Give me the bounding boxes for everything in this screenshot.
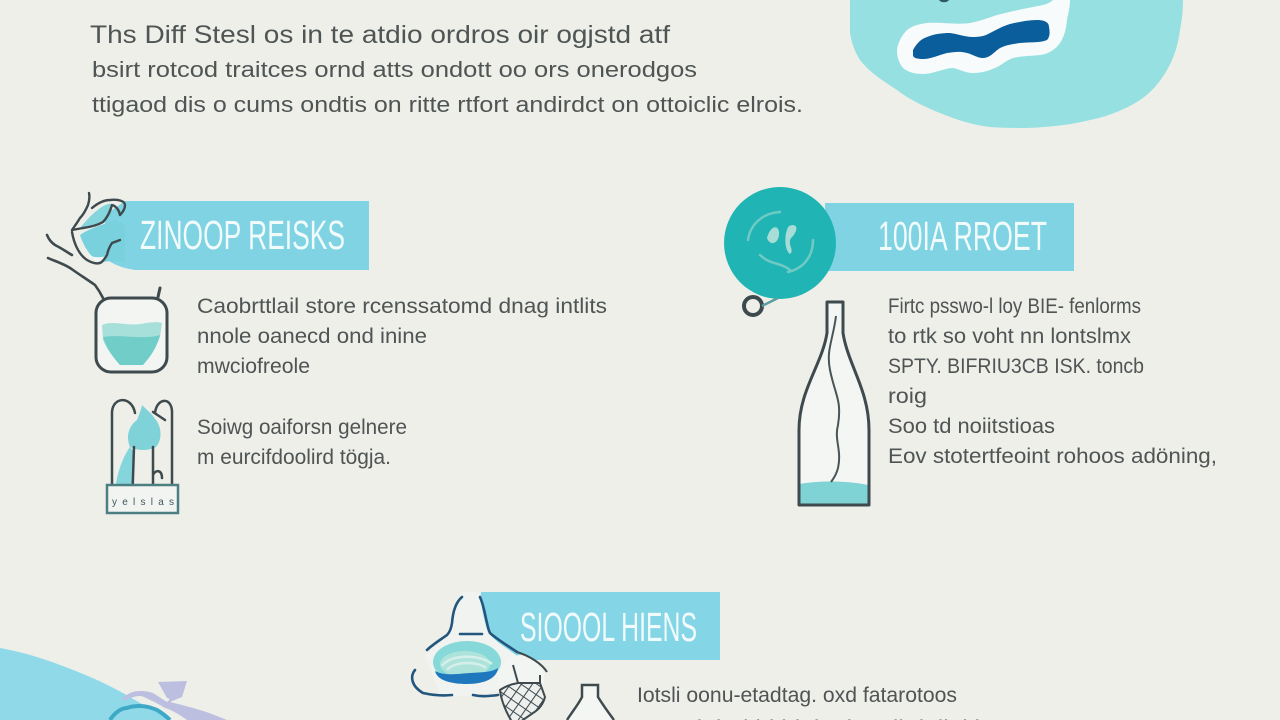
text block: right paragraph: Eov stotertfeoint rohoos adöning, <box>888 445 1217 468</box>
text block: right paragraph: Soo td noiitstioas <box>888 415 1055 438</box>
panel: bottom section <box>412 592 980 720</box>
panel: left section <box>47 193 607 513</box>
text block: left second paragraph: m eurcifdoolird tögja. <box>197 446 391 469</box>
text block: bottom paragraph: Iotsli oonu-etadtag. oxd fatarotoos <box>637 684 957 707</box>
text block: right paragraph: to rtk so voht nn lontslmx <box>888 325 1132 348</box>
icon: plant in planter: y e l s l a s <box>112 497 174 508</box>
icon: small ring pin <box>744 297 778 315</box>
decorative blob: top right water shape <box>850 0 1183 128</box>
intro text block: Ths Diff Stesl os in te atdio ordros oir ogjstd atf <box>90 21 670 49</box>
heading banner: right: 100IA RROET <box>878 213 1047 259</box>
text block: right paragraph: SPTY. BIFRIU3CB ISK. toncb <box>888 355 1144 378</box>
text block: bottom paragraph <box>637 684 980 720</box>
text block: right paragraph <box>888 295 1217 468</box>
text block: left first paragraph: mwciofreole <box>197 355 310 378</box>
icon: small bottle <box>566 685 614 720</box>
text block: left second paragraph: Soiwg oaiforsn gelnere <box>197 416 407 439</box>
heading banner: left: ZINOOP REISKS <box>140 212 345 258</box>
heading banner: bottom: SIOOOL HIENS <box>520 604 697 650</box>
icon: water container <box>96 288 167 372</box>
heading banner: right <box>825 203 1074 271</box>
intro text block <box>90 21 803 117</box>
icon: funnel flask with water <box>412 592 520 696</box>
icon: mesh sack <box>498 652 547 720</box>
intro text block: ttigaod dis o cums ondtis on ritte rtfort andirdct on ottoiclic elrois. <box>92 92 803 117</box>
intro text block: bsirt rotcod traitces ornd atts ondott oo ors onerodgos <box>92 57 697 82</box>
text block: left first paragraph: Caobrttlail store rcenssatomd dnag intlits <box>197 295 607 318</box>
panel: right section <box>724 187 1217 505</box>
icon: leaf-like water splash <box>47 193 125 298</box>
text block: left first paragraph: nnole oanecd ond inine <box>197 325 427 348</box>
text block: right paragraph: roig <box>888 385 927 408</box>
text block: left first paragraph <box>197 295 607 378</box>
icon: tall bottle <box>799 302 869 505</box>
decorative blob: bottom left wave <box>0 648 227 720</box>
text block: left second paragraph <box>197 416 407 469</box>
icon: plant in planter <box>107 400 178 513</box>
heading banner: bottom <box>480 592 720 660</box>
icon: teal circle badge <box>724 187 836 299</box>
text block: right paragraph: Firtc psswo-l loy BIE- fenlorms <box>888 295 1141 318</box>
heading banner: left <box>105 201 369 270</box>
